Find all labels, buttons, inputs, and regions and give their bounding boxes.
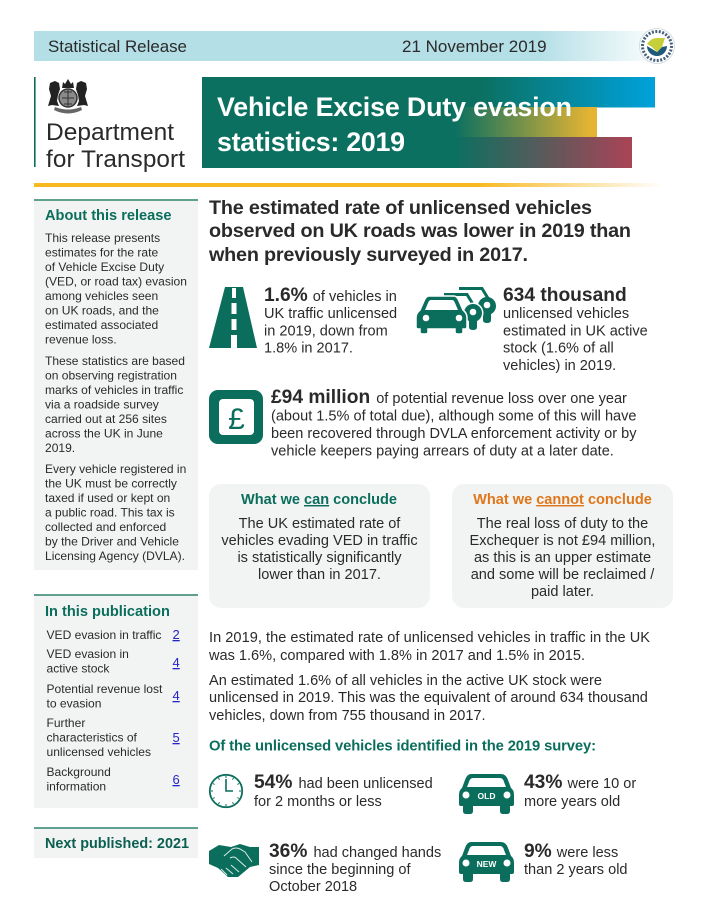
stat: 634 thousand: unlicensed vehicles: [503, 306, 629, 322]
stat: 1.6 percent in traffic: in 2019, down from: [264, 324, 388, 340]
stat: 634 thousand: stock (1.6% of all: [503, 340, 614, 356]
contents list: Background: [46, 765, 111, 779]
text block: These statistics are based: [45, 354, 185, 368]
stat: 9 percent: [524, 841, 628, 878]
title banner: [202, 77, 655, 168]
icon: queue of cars: [416, 288, 496, 334]
title: Vehicle Excise Duty evasion: [217, 92, 572, 122]
text block: (VED, or road tax) evasion: [45, 274, 187, 288]
stat: 54 percent: 54% had been unlicensed: [254, 772, 433, 793]
heading: What we can conclude: [241, 492, 397, 508]
yellow divider: [34, 183, 664, 187]
logo text: Department: [46, 119, 174, 146]
text block: summary paragraphs: was 1.6%, compared with 1.8% in 2017 and 1.5% in 2015.: [208, 648, 585, 664]
stat: 43 percent: [524, 772, 636, 810]
icon: pound sign: £: [228, 403, 245, 436]
header band: [34, 31, 664, 61]
stat: 54 percent: for 2 months or less: [254, 794, 382, 810]
stat: 634 thousand: 634 thousand: [503, 285, 627, 306]
text block: summary paragraphs: vehicles, down from 755 thousand in 2017.: [209, 708, 486, 724]
contents list: to evasion: [46, 696, 101, 710]
stat: 634 thousand: estimated in UK active: [503, 324, 648, 340]
text: The real loss of duty to the: [477, 516, 648, 532]
stat: 634 thousand: [503, 285, 648, 374]
contents list: unlicensed vehicles: [46, 745, 151, 759]
car label: NEW: [477, 859, 497, 869]
text block: revenue loss.: [45, 332, 117, 346]
heading: About this release: [45, 208, 172, 224]
panel: in this publication: [34, 594, 198, 808]
text: and some will be reclaimed /: [471, 567, 655, 583]
stat: 94 million: vehicle keepers paying arrears of duty at a later date.: [271, 444, 614, 460]
contents list: 4: [172, 655, 180, 670]
icon: new car: [459, 842, 514, 882]
icon: road: [209, 287, 257, 348]
stat: 1.6 percent in traffic: 1.6% of vehicles in: [264, 285, 397, 306]
contents list: active stock: [46, 662, 110, 676]
contents list: Potential revenue lost: [46, 682, 163, 696]
text block: estimates for the rate: [45, 246, 158, 260]
text block: across the UK in June: [45, 426, 163, 440]
panel: what we can conclude: [209, 484, 430, 608]
heading: What we cannot conclude: [473, 492, 652, 508]
text block: by the Driver and Vehicle: [45, 534, 179, 548]
text: paid later.: [531, 584, 594, 600]
text block: a public road. This tax is: [45, 506, 175, 520]
stat: 36 percent: October 2018: [269, 879, 357, 895]
contents list: VED evasion in: [46, 647, 129, 661]
text: is statistically significantly: [237, 550, 402, 566]
text: [470, 516, 655, 600]
stat: 634 thousand: vehicles) in 2019.: [503, 358, 616, 374]
main headline: observed on UK roads was lower in 2019 than: [209, 220, 631, 242]
stat: 1.6 percent in traffic: [264, 285, 397, 356]
panel: about this release: [34, 199, 198, 570]
icon: clock: [210, 775, 242, 807]
text block: 2019.: [45, 441, 75, 455]
stat: 94 million: been recovered through DVLA enforcement activity or by: [271, 426, 637, 442]
stat: 43 percent: 43% were 10 or: [524, 772, 636, 793]
text block: among vehicles seen: [45, 289, 158, 303]
panel: next published: Next published: 2021: [45, 836, 189, 852]
text block: [45, 231, 187, 563]
icon: National Statistics logo: [640, 28, 674, 64]
stat: 9 percent: 9% were less: [524, 841, 618, 862]
contents list: [46, 627, 180, 794]
stat: 1.6 percent in traffic: UK traffic unlicensed: [264, 306, 397, 322]
icon: handshake: [209, 844, 259, 877]
contents list: Further: [46, 716, 85, 730]
main headline: The estimated rate of unlicensed vehicles: [209, 197, 592, 219]
contents list: information: [46, 780, 106, 794]
stat: 43 percent: more years old: [524, 794, 620, 810]
stat: 94 million: £94 million of potential revenue loss over one year: [271, 387, 627, 408]
text: Exchequer is not £94 million,: [470, 533, 655, 549]
heading: In this publication: [45, 604, 170, 620]
stat: 36 percent: since the beginning of: [269, 862, 411, 878]
main headline: when previously surveyed in 2017.: [208, 244, 528, 266]
stat: 94 million: (about 1.5% of total due), although some of this will have: [271, 408, 637, 424]
stat: 54 percent: [254, 772, 433, 810]
car label: OLD: [478, 791, 495, 801]
stat: 36 percent: 36% had changed hands: [269, 841, 441, 862]
text block: collected and enforced: [45, 520, 166, 534]
text block: via a roadside survey: [45, 398, 159, 412]
stat: 36 percent: [269, 841, 441, 895]
text block: the UK must be correctly: [45, 476, 177, 490]
title banner: statistics: 2019: [217, 127, 405, 157]
contents list: 2: [172, 627, 180, 642]
text: [221, 516, 418, 583]
contents list: VED evasion in traffic: [46, 628, 161, 642]
text block: summary paragraphs: In 2019, the estimated rate of unlicensed vehicles in traffic in the UK: [209, 630, 650, 646]
icon: old car: [459, 774, 514, 814]
contents list: 6: [172, 772, 180, 787]
text block: Licensing Agency (DVLA).: [45, 549, 185, 563]
icon: pound sign: [209, 390, 263, 444]
text: The UK estimated rate of: [239, 516, 401, 532]
stat: 9 percent: than 2 years old: [524, 862, 628, 878]
text block: estimated associated: [45, 318, 158, 332]
text block: marks of vehicles in traffic: [45, 383, 183, 397]
icon: royal crest: [48, 79, 88, 114]
release label: Statistical Release: [48, 37, 187, 56]
stat: 1.6 percent in traffic: 1.8% in 2017.: [264, 340, 353, 356]
text block: on UK roads, and the: [45, 304, 159, 318]
text block: of Vehicle Excise Duty: [45, 260, 164, 274]
contents list: characteristics of: [46, 730, 138, 744]
panel: next published: [34, 827, 198, 858]
text block: This release presents: [45, 231, 160, 245]
stat: 94 million: [271, 387, 637, 460]
text block: Every vehicle registered in: [45, 462, 186, 476]
text: as this is an upper estimate: [474, 550, 651, 566]
text block: taxed if used or kept on: [45, 491, 170, 505]
contents list: 4: [172, 688, 180, 703]
text block: summary paragraphs: An estimated 1.6% of all vehicles in the active UK stock were: [209, 673, 602, 689]
text: lower than in 2017.: [258, 567, 381, 583]
contents list: 5: [172, 730, 180, 745]
text block: summary paragraphs: [208, 630, 650, 724]
text block: on observing registration: [45, 368, 177, 382]
main headline: [208, 197, 631, 266]
text block: carried out at 256 sites: [45, 412, 167, 426]
Department for Transport logo: for Transport: [46, 146, 185, 173]
Department for Transport logo: [34, 77, 185, 173]
subheading: Of the unlicensed vehicles identified in the 2019 survey:: [209, 738, 596, 754]
text block: summary paragraphs: unlicensed in 2019. This was the equivalent of around 634 thousand: [209, 690, 648, 706]
text: vehicles evading VED in traffic: [221, 533, 418, 549]
panel: what we cannot conclude: [452, 484, 673, 608]
release date: 21 November 2019: [402, 37, 547, 56]
